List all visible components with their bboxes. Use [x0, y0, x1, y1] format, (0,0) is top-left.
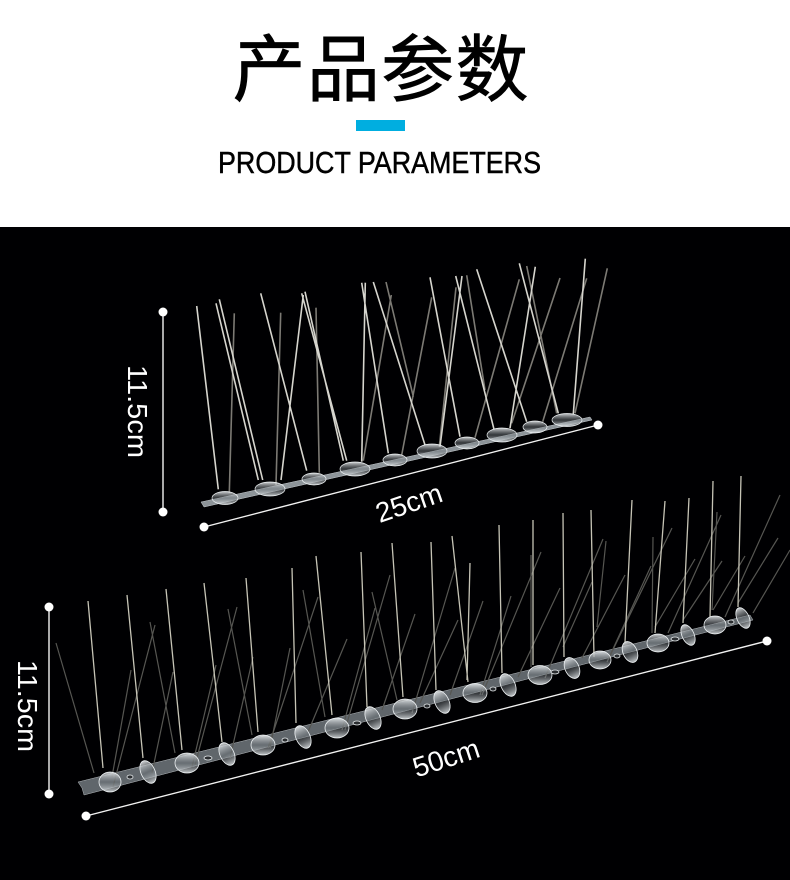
spikes: bright wires — [88, 476, 741, 768]
dimension: top strip length: 25cm — [371, 477, 446, 529]
header: white band — [0, 0, 790, 227]
spikes: bright wires — [197, 259, 585, 489]
dimension: bottom strip height — [12, 602, 54, 798]
spikes: dark wires — [56, 495, 790, 787]
spikes: dark wires — [229, 266, 607, 493]
title: 产品参数: 产品参数 — [232, 30, 528, 111]
accent bar — [356, 120, 405, 131]
mounting feet — [99, 605, 753, 792]
dimension: bottom strip length — [82, 636, 772, 820]
dimension: bottom strip height: 11.5cm — [12, 660, 43, 752]
dimension: top strip height — [122, 308, 168, 516]
mounting feet — [212, 414, 582, 504]
dimension: bottom strip length: 50cm — [409, 733, 483, 783]
strip base — [201, 417, 592, 507]
strip holes — [127, 620, 734, 779]
product: 25cm bird spike strip — [197, 259, 607, 507]
panel: black product background — [0, 227, 790, 880]
strip base — [78, 615, 753, 795]
dimension: top strip height: 11.5cm — [122, 365, 153, 458]
subtitle: PRODUCT PARAMETERS: PRODUCT PARAMETERS — [218, 145, 541, 180]
dimension: top strip length — [200, 420, 602, 532]
product: 50cm bird spike strip — [56, 476, 790, 795]
